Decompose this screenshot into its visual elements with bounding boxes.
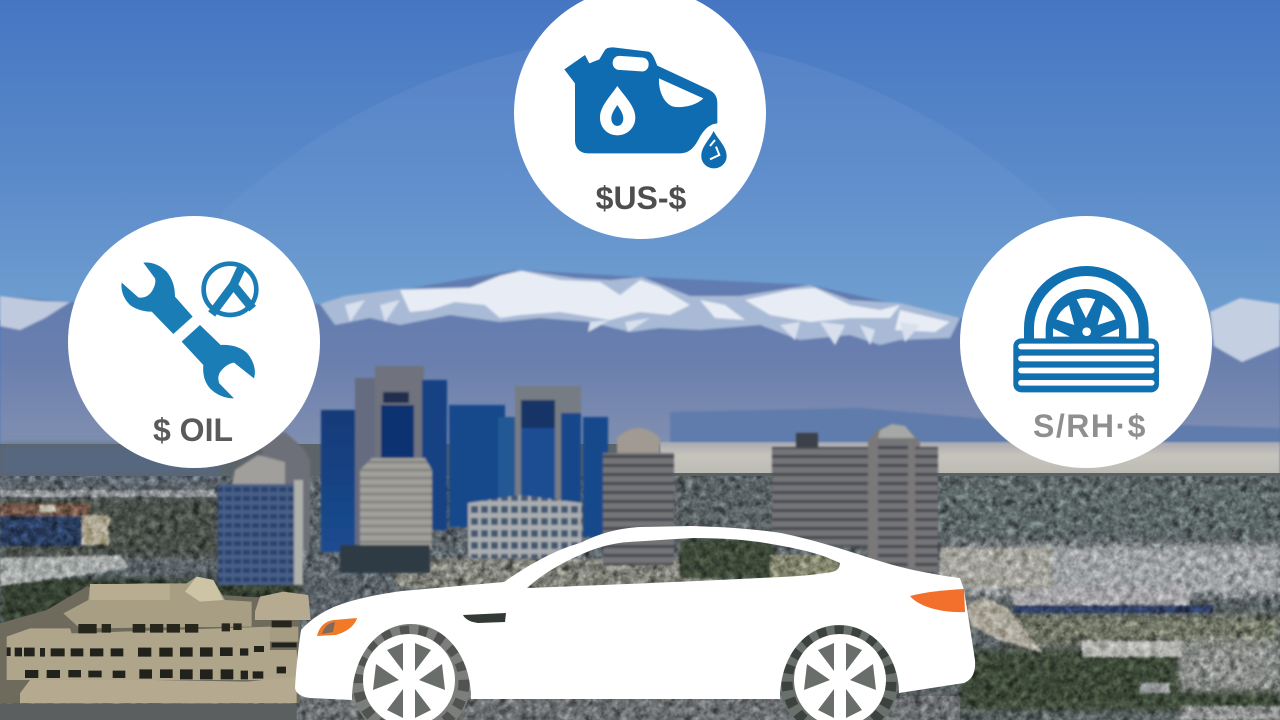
upper tier lighter band: [90, 584, 170, 600]
label: $US-$: [596, 180, 687, 216]
right block: [255, 592, 311, 620]
label: S/RH·$: [1033, 408, 1147, 444]
right twin: tower: [868, 424, 938, 572]
wheel openings: [1053, 298, 1119, 337]
tread stripes: [1018, 344, 1154, 386]
jug window: [659, 78, 703, 107]
dark base left of centre: [340, 545, 430, 573]
icon: oil jug with drops: [564, 47, 727, 168]
glass tower with grey frame: [515, 386, 581, 511]
desert plain: [660, 442, 1280, 475]
upper windows: [78, 621, 292, 633]
road strip left: [0, 490, 218, 497]
front wheel: [363, 634, 455, 720]
car body: [295, 526, 975, 700]
tread block: [1013, 338, 1159, 392]
background: sky: [0, 0, 1280, 320]
wrench upper half: [121, 262, 193, 334]
white windowed block: [468, 495, 582, 558]
white drop: [600, 86, 635, 135]
snow highlights: [400, 271, 950, 332]
jug: [564, 47, 717, 153]
wheel hub: [1082, 327, 1091, 336]
base block: [20, 677, 297, 703]
wheel wells: [351, 624, 898, 720]
headlight: [317, 618, 357, 636]
falling drop: [701, 131, 727, 168]
tire arch: [1029, 271, 1144, 340]
car: [295, 526, 975, 720]
snow streaks: [345, 300, 920, 345]
door handle: [463, 613, 506, 623]
tail light: [910, 589, 965, 612]
downtown skyline: [218, 366, 938, 585]
roof fin: [185, 577, 223, 602]
drop highlight: [710, 140, 719, 159]
beige block: [360, 458, 432, 550]
icon: wrench and gauge: [121, 262, 256, 398]
dark roof surround: [0, 587, 300, 703]
red roof building: [0, 503, 109, 546]
snow ridge: right peak: [1210, 298, 1280, 362]
badge: tires: [960, 216, 1212, 468]
badge: oil service: [68, 216, 320, 468]
blue tower left: [321, 410, 357, 552]
lower windows: [25, 667, 286, 679]
snow ridge: left peak: [0, 296, 70, 330]
inner drop: [611, 105, 623, 126]
domed beige tower: [603, 428, 674, 565]
city ground: [0, 444, 1280, 720]
gauge dial: [204, 264, 256, 315]
right mid block: [270, 627, 298, 642]
wrench lower half: [182, 325, 255, 398]
low street block behind car: [395, 558, 715, 588]
foreground tan building: [0, 577, 311, 720]
label: $ OIL: [153, 412, 233, 448]
snow ridge: main range: [320, 270, 960, 345]
light lot left: [0, 555, 130, 586]
distant ridge band: [670, 408, 1280, 446]
badge: oil can: [514, 0, 766, 239]
road beneath car: [300, 696, 960, 720]
base band: [0, 704, 297, 720]
blue tower centre: [449, 405, 505, 527]
far left tower: [262, 432, 310, 550]
mid tier: [7, 627, 298, 680]
right twin: wide block: [772, 433, 868, 547]
central grey tower: [355, 366, 447, 556]
blue tower right: [583, 417, 608, 537]
icon: tire and wheel: [1013, 271, 1159, 392]
handle opening: [612, 55, 649, 72]
upper tier: [63, 577, 252, 628]
left blue block with beige top: [218, 455, 303, 585]
middle windows: [7, 643, 297, 657]
mountains: [0, 270, 1280, 450]
trees behind car: [680, 540, 775, 578]
ground detail blocks: [0, 445, 1280, 710]
wheel rim: [1046, 289, 1126, 340]
translucent dome arc: [222, 35, 1058, 320]
ground texture: [0, 476, 1280, 720]
rear wheel: [794, 634, 886, 720]
right low buildings: [940, 548, 1280, 720]
beige block behind car window: [770, 555, 845, 580]
